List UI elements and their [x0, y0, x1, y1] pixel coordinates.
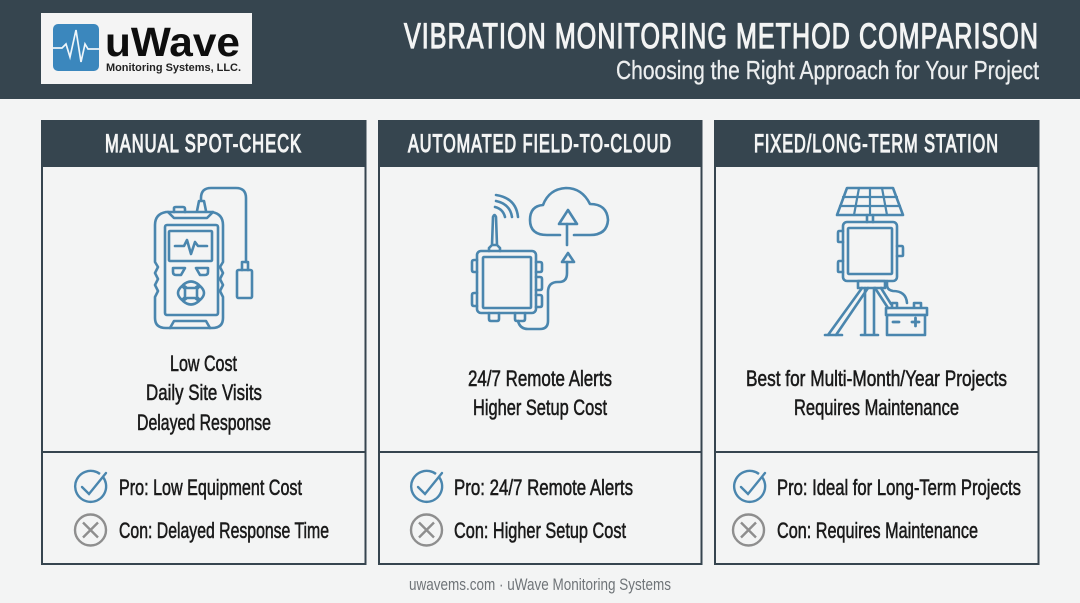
body text: Low Cost	[170, 351, 237, 376]
pro row	[411, 471, 633, 502]
panel: automated field-to-cloud	[378, 120, 702, 564]
body text	[746, 366, 1007, 420]
pro row	[75, 471, 302, 502]
body text	[468, 366, 612, 420]
body text: Daily Site Visits	[146, 380, 262, 405]
panel heading	[378, 120, 702, 167]
con row	[75, 514, 329, 546]
panel heading: MANUAL SPOT-CHECK	[105, 130, 302, 158]
panel: manual spot-check	[41, 120, 366, 564]
body text: Requires Maintenance	[794, 395, 959, 420]
icon: check	[411, 471, 442, 502]
panel: fixed/long-term station	[714, 120, 1039, 564]
icon: check	[734, 471, 765, 502]
icon: solar tripod station	[825, 188, 927, 335]
panel heading	[41, 120, 366, 167]
body text: Delayed Response	[137, 410, 271, 435]
icon: cross	[411, 514, 442, 546]
panel heading: AUTOMATED FIELD-TO-CLOUD	[408, 130, 672, 158]
con row	[411, 514, 626, 546]
divider	[378, 451, 702, 453]
logo tagline: Monitoring Systems, LLC.	[106, 62, 241, 74]
con row: Con: Requires Maintenance	[777, 518, 978, 543]
icon: cross	[733, 514, 764, 546]
icon: check	[75, 471, 106, 502]
body text: Best for Multi-Month/Year Projects	[746, 366, 1007, 391]
footer: uwavems.com · uWave Monitoring Systems	[409, 575, 671, 594]
icon: cross	[75, 514, 106, 546]
body text	[137, 351, 271, 435]
panel heading	[714, 120, 1039, 167]
logo wordmark: uWave	[105, 19, 240, 65]
con row: Con: Delayed Response Time	[119, 518, 329, 543]
icon: logo wave	[53, 24, 99, 71]
pro row: Pro: 24/7 Remote Alerts	[454, 475, 633, 500]
body text: Higher Setup Cost	[473, 395, 607, 420]
icon: handheld vibration meter	[155, 188, 252, 328]
divider	[41, 451, 366, 453]
pro row	[734, 471, 1021, 502]
con row: Con: Higher Setup Cost	[454, 518, 626, 543]
body text: 24/7 Remote Alerts	[468, 366, 612, 391]
header band	[0, 0, 1080, 99]
logo	[41, 13, 252, 84]
pro row: Pro: Low Equipment Cost	[119, 475, 302, 500]
divider	[714, 451, 1039, 453]
icon: cloud-connected logger	[472, 188, 608, 329]
con row	[733, 514, 978, 546]
